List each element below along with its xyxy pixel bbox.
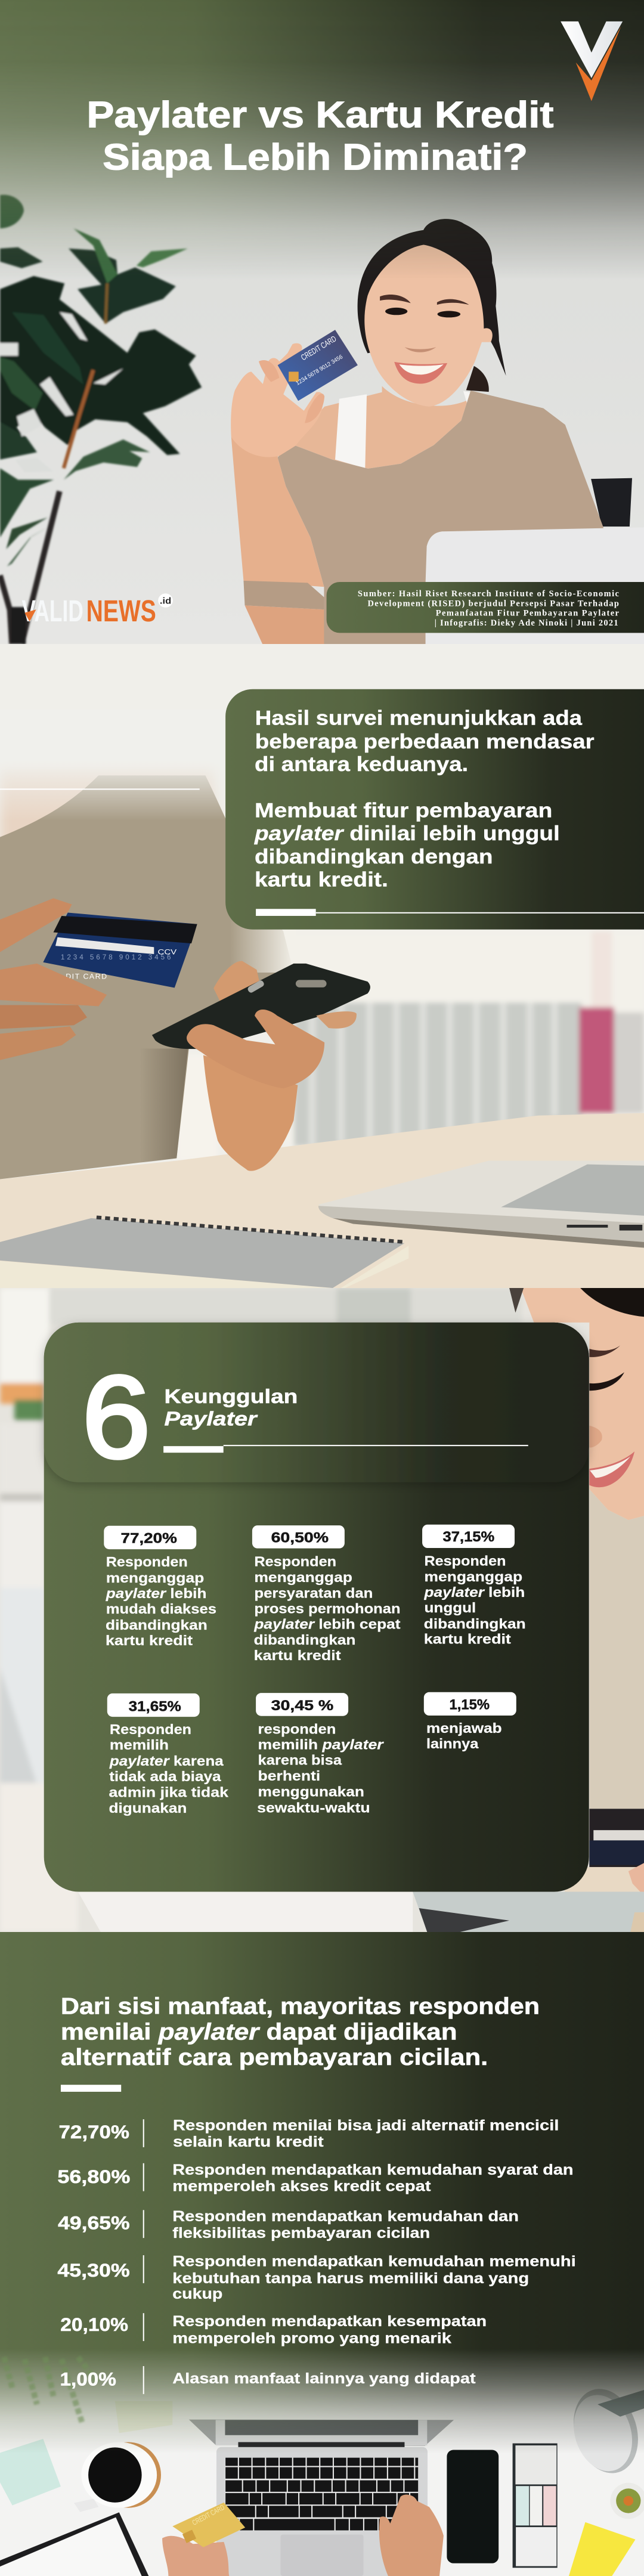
item: 49,65% bbox=[58, 2209, 519, 2241]
item: 72,70%: selain kartu kredit bbox=[173, 2134, 324, 2150]
stat: 60,50%: 60,50% bbox=[271, 1530, 329, 1546]
forearm bbox=[203, 1055, 298, 1171]
stat: 37,15%: 37,15% bbox=[443, 1529, 494, 1545]
photo: person: 1234 5678 9012 3456 bbox=[61, 953, 171, 961]
stat: 77,20%: 77,20% bbox=[121, 1531, 177, 1547]
stat: 30,45 %: karena bisa bbox=[258, 1753, 342, 1768]
photo: table bbox=[0, 1113, 644, 1288]
photo: faded plant bbox=[4, 2357, 98, 2423]
section: survey bbox=[0, 644, 644, 1288]
photo: laptop bbox=[426, 527, 644, 644]
stat: 30,45 %: responden bbox=[258, 1721, 336, 1736]
item: 20,10%: 20,10% bbox=[60, 2314, 128, 2335]
card bbox=[43, 912, 197, 988]
fingers on card bbox=[0, 898, 72, 952]
phone bbox=[447, 2450, 499, 2563]
stat: 37,15%: menganggap bbox=[425, 1569, 522, 1584]
stat: 30,45 %: 30,45 % bbox=[271, 1698, 333, 1714]
photo: laptop bbox=[78, 1892, 644, 1932]
stat: 31,65%: admin jika tidak bbox=[109, 1784, 228, 1800]
stat: 37,15%: dibandingkan bbox=[424, 1616, 526, 1631]
item: 45,30%: Responden mendapatkan kemudahan memenuhi bbox=[172, 2254, 576, 2270]
title: Paylater vs Kartu Kredit bbox=[86, 95, 553, 136]
stat: 60,50%: dibandingkan bbox=[254, 1632, 355, 1648]
callout: survey: beberapa perbedaan mendasar bbox=[255, 730, 595, 753]
divider line bbox=[0, 788, 200, 790]
photo: desk top view bbox=[0, 2380, 644, 2576]
item: 20,10% bbox=[60, 2313, 487, 2346]
photo: person bbox=[0, 767, 370, 1179]
background gradient bbox=[0, 1932, 644, 2454]
photo: plant bbox=[0, 195, 202, 644]
photo: woman bbox=[509, 1288, 644, 1896]
panel header: 6 bbox=[82, 1352, 150, 1482]
item: 56,80% bbox=[57, 2162, 574, 2195]
hand behind phone bbox=[213, 961, 263, 1022]
credit card bbox=[278, 330, 358, 401]
stat: 31,65%: Responden bbox=[110, 1722, 191, 1737]
logo: Validnews: .id bbox=[160, 596, 171, 606]
source box: Development (RISED) berjudul Persepsi Pasar Terhadap bbox=[367, 599, 619, 609]
stat: 1,15%: 1,15% bbox=[450, 1697, 490, 1713]
sweater bbox=[263, 391, 603, 644]
callout: survey bbox=[225, 689, 644, 930]
callout: survey: dibandingkan dengan bbox=[255, 846, 493, 868]
item: 49,65%: fleksibilitas pembayaran cicilan bbox=[172, 2225, 430, 2241]
logo: Validnews bbox=[22, 593, 173, 628]
stat: 77,20%: menganggap bbox=[106, 1570, 204, 1586]
stat: 37,15%: unggul bbox=[425, 1600, 476, 1615]
callout: survey: Hasil survei menunjukkan ada bbox=[255, 707, 583, 730]
stat: 37,15%: Responden bbox=[425, 1553, 506, 1569]
heading: Dari sisi manfaat, mayoritas responden bbox=[61, 1993, 540, 2020]
stat: 30,45 %: berhenti bbox=[258, 1768, 320, 1784]
photo: woman bbox=[231, 219, 603, 644]
stat: 1,15% bbox=[424, 1692, 516, 1751]
stat: 31,65%: paylater karena bbox=[109, 1753, 224, 1769]
item: 45,30%: cukup bbox=[172, 2286, 222, 2302]
source box: Sumber: Hasil Riset Research Institute of Socio-Economic bbox=[358, 589, 620, 599]
hair bun bbox=[466, 366, 489, 392]
tank top bbox=[335, 394, 367, 468]
item: 49,65%: Responden mendapatkan kemudahan dan bbox=[172, 2209, 519, 2225]
section: benefits bbox=[0, 1932, 644, 2576]
stat: 77,20%: dibandingkan bbox=[106, 1617, 208, 1633]
logo: Valid mark bbox=[561, 21, 623, 101]
photo: window and radiator bbox=[177, 931, 644, 1162]
photo: blurred background bbox=[0, 1288, 522, 1932]
stat: 1,15%: menjawab bbox=[426, 1720, 502, 1736]
gold card with hand: CREDIT CARD bbox=[191, 2503, 226, 2527]
stat: 60,50%: persyaratan dan bbox=[254, 1585, 373, 1600]
coffee cup bbox=[74, 2442, 161, 2512]
notepad bbox=[513, 2444, 558, 2568]
stat: 60,50% bbox=[252, 1525, 401, 1663]
section: hero bbox=[0, 0, 644, 644]
photo: person: DIT CARD bbox=[66, 972, 107, 980]
stat: 77,20%: mudah diakses bbox=[106, 1601, 216, 1617]
stat: 60,50%: proses permohonan bbox=[254, 1601, 401, 1617]
item: 1,00% bbox=[60, 2366, 476, 2394]
arm bbox=[231, 437, 324, 587]
source box: | Infografis: Dieky Ade Ninoki | Juni 2021 bbox=[435, 618, 618, 628]
stat: 37,15%: paylater lebih bbox=[423, 1584, 525, 1600]
stat: 1,15%: lainnya bbox=[426, 1736, 479, 1751]
stat: 60,50%: menganggap bbox=[254, 1569, 352, 1585]
title: Siapa Lebih Diminati? bbox=[103, 137, 528, 178]
stat: 77,20% bbox=[104, 1526, 216, 1648]
heading bbox=[61, 1993, 540, 2092]
item: 20,10%: Responden mendapatkan kesempatan bbox=[172, 2314, 487, 2330]
glass bbox=[563, 2380, 644, 2482]
source box bbox=[327, 582, 644, 633]
stat: 30,45 %: menggunakan bbox=[258, 1784, 364, 1800]
stat: 31,65% bbox=[107, 1693, 228, 1816]
item: 72,70% bbox=[58, 2118, 559, 2150]
stat: 60,50%: kartu kredit bbox=[254, 1648, 341, 1663]
photo: woman: 1234 5678 9012 3456 bbox=[295, 354, 344, 387]
sticky note teal bbox=[0, 2439, 61, 2506]
right hand bbox=[379, 2494, 444, 2576]
stat: 60,50%: paylater lebih cepat bbox=[253, 1617, 401, 1632]
stat: 30,45 %: sewaktu-waktu bbox=[257, 1800, 370, 1816]
item: 45,30%: kebutuhan tanpa harus memiliki dana yang bbox=[172, 2271, 529, 2287]
callout: survey: kartu kredit. bbox=[255, 868, 388, 891]
gold card with hand bbox=[162, 2503, 245, 2576]
stat: 77,20%: kartu kredit bbox=[106, 1633, 193, 1648]
face bbox=[364, 245, 493, 407]
yellow sticky note bbox=[569, 2522, 636, 2576]
phone bbox=[152, 964, 370, 1049]
logo: Validnews: VALID bbox=[22, 594, 83, 628]
photo: chair bbox=[591, 478, 632, 527]
photo: person: CCV bbox=[157, 948, 177, 956]
hair bbox=[358, 219, 506, 376]
stat: 37,15% bbox=[422, 1525, 526, 1646]
item: 72,70%: Responden menilai bisa jadi alternatif mencicil bbox=[173, 2118, 559, 2134]
stat: 30,45 % bbox=[256, 1693, 384, 1816]
stat: 30,45 %: memilih paylater bbox=[258, 1736, 384, 1752]
stat: 31,65%: tidak ada biaya bbox=[109, 1769, 221, 1784]
heading: alternatif cara pembayaran cicilan. bbox=[61, 2044, 488, 2070]
panel header: Keunggulan bbox=[165, 1386, 298, 1408]
callout: survey: paylater dinilai lebih unggul bbox=[254, 822, 560, 845]
source box: Pemanfaatan Fitur Pembayaran Paylater bbox=[436, 608, 620, 618]
stat: 60,50%: Responden bbox=[254, 1553, 336, 1569]
item: 1,00%: Alasan manfaat lainnya yang didapat bbox=[172, 2371, 476, 2387]
laptop bbox=[189, 2420, 454, 2576]
stat: 31,65%: memilih bbox=[110, 1737, 169, 1753]
item: 56,80%: Responden mendapatkan kemudahan syarat dan bbox=[172, 2162, 574, 2178]
item: 45,30% bbox=[57, 2254, 576, 2302]
hand bbox=[231, 343, 324, 457]
notebook bbox=[0, 2512, 148, 2576]
stat: 31,65%: digunakan bbox=[109, 1800, 187, 1816]
panel header bbox=[44, 1323, 589, 1482]
panel: advantages bbox=[44, 1323, 589, 1892]
item: 56,80%: 56,80% bbox=[57, 2166, 130, 2187]
fingers on phone bbox=[187, 1010, 324, 1088]
item: 45,30%: 45,30% bbox=[57, 2259, 130, 2281]
top fade bbox=[0, 710, 312, 821]
chest and shoulder bbox=[289, 386, 470, 469]
panel header: Paylater bbox=[165, 1408, 258, 1431]
callout: survey: Membuat fitur pembayaran bbox=[255, 800, 552, 822]
item: 20,10%: memperoleh promo yang menarik bbox=[172, 2330, 451, 2346]
sleeve cuff bbox=[243, 581, 324, 609]
stat: 37,15%: kartu kredit bbox=[424, 1631, 511, 1646]
title bbox=[86, 95, 553, 178]
heading: menilai paylater dapat dijadikan bbox=[61, 2018, 457, 2045]
item: 56,80%: memperoleh akses kredit cepat bbox=[172, 2179, 431, 2195]
logo: Validnews: NEWS bbox=[86, 594, 156, 628]
cactus pot bbox=[611, 2483, 644, 2519]
callout: survey: di antara keduanya. bbox=[255, 753, 468, 776]
photo: woman: CREDIT CARD bbox=[299, 334, 338, 362]
stat: 77,20%: paylater lebih bbox=[106, 1586, 206, 1601]
photo: notebook bbox=[0, 1218, 408, 1288]
photo: laptop bbox=[318, 1160, 644, 1248]
stat: 77,20%: Responden bbox=[106, 1554, 188, 1569]
stat: 31,65%: 31,65% bbox=[129, 1698, 181, 1714]
item: 72,70%: 72,70% bbox=[58, 2121, 129, 2142]
title gradient bbox=[0, 0, 644, 279]
item: 49,65%: 49,65% bbox=[58, 2212, 130, 2234]
section: six advantages bbox=[0, 1288, 644, 1932]
item: 1,00%: 1,00% bbox=[60, 2368, 116, 2389]
